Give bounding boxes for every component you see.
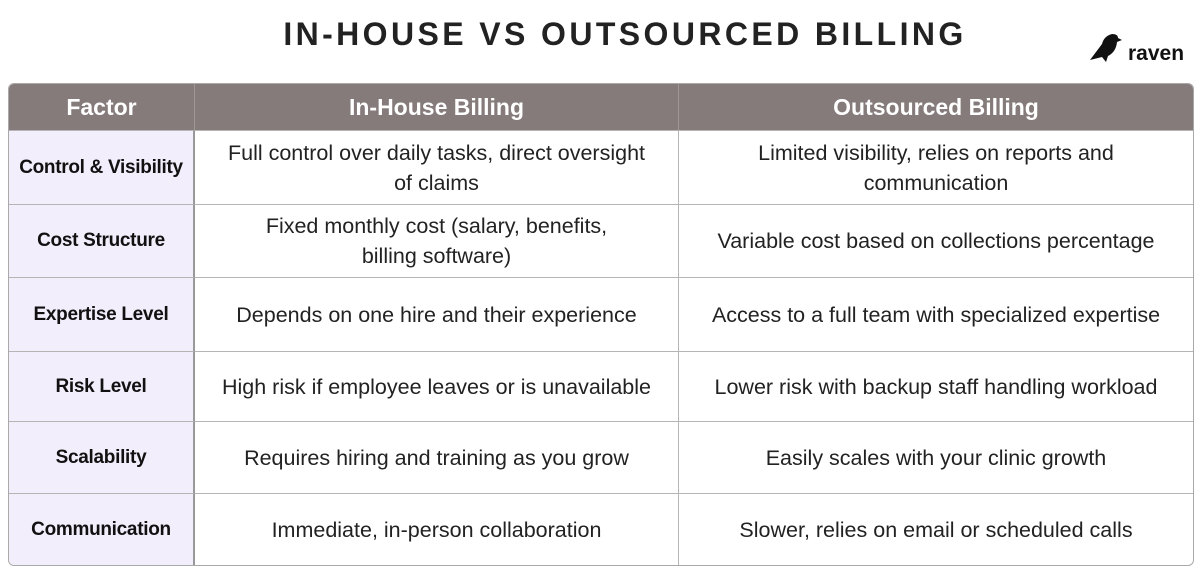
comparison table: Lower risk with backup staff handling workload [714, 374, 1157, 398]
comparison table: communication [864, 170, 1008, 194]
comparison table: Depends on one hire and their experience [236, 302, 637, 326]
comparison table: Cost Structure [37, 230, 165, 251]
comparison table: billing software) [362, 244, 511, 268]
comparison table: Scalability [56, 446, 146, 468]
comparison table: Requires hiring and training as you grow [244, 446, 629, 470]
title: IN-HOUSE VS OUTSOURCED BILLING [283, 16, 967, 52]
comparison table: Control & Visibility [19, 156, 183, 178]
comparison table: Limited visibility, relies on reports and [758, 140, 1114, 164]
comparison table: Expertise Level [34, 304, 168, 324]
comparison table: Easily scales with your clinic growth [766, 446, 1106, 470]
comparison table: Risk Level [56, 376, 146, 396]
comparison table: Outsourced Billing [833, 94, 1039, 120]
logo: raven [1090, 34, 1184, 65]
logo: raven: raven [1128, 42, 1184, 65]
comparison table: High risk if employee leaves or is unavailable [222, 374, 651, 398]
comparison table: of claims [394, 170, 479, 194]
comparison table: Immediate, in-person collaboration [272, 518, 601, 542]
comparison table: Variable cost based on collections percentage [717, 229, 1155, 253]
comparison table: In-House Billing [349, 94, 524, 120]
comparison table: Access to a full team with specialized expertise [712, 302, 1160, 326]
comparison table: Fixed monthly cost (salary, benefits, [266, 214, 607, 238]
comparison table: Communication [31, 518, 171, 540]
comparison table: Full control over daily tasks, direct oversight [228, 140, 645, 164]
comparison table: Slower, relies on email or scheduled calls [739, 518, 1133, 542]
comparison table: Factor [66, 94, 137, 120]
